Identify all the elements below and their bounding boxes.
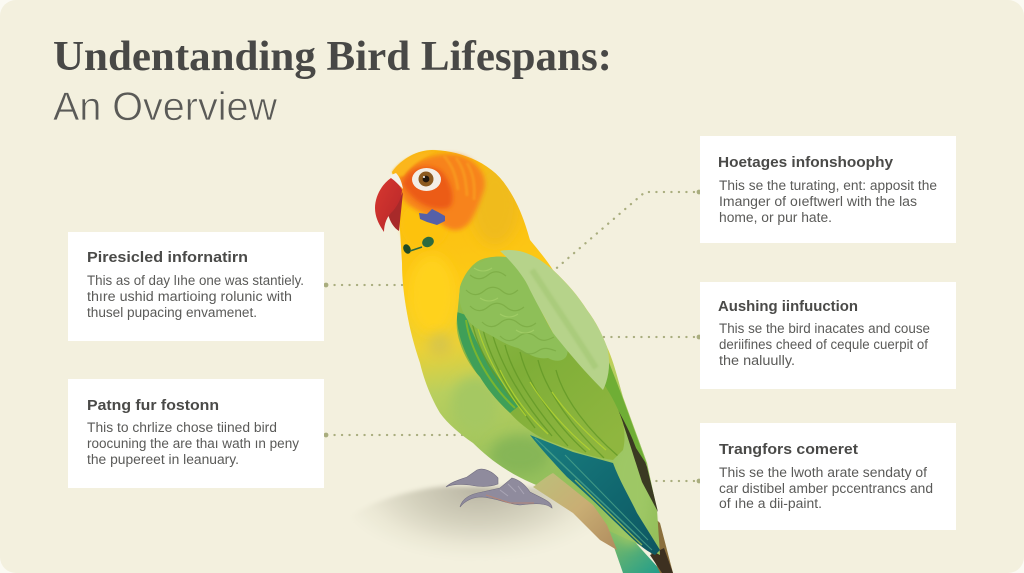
card body: roocuning the are thaı wath ın peny xyxy=(87,436,299,451)
face orange mask xyxy=(398,154,485,230)
card body: Imanger of oıeftwerl with the las xyxy=(719,194,917,209)
cheek blue patch xyxy=(419,209,445,225)
card heading: Patng fur fostonn xyxy=(87,397,219,414)
card body: car distibel amber pccentrancs and xyxy=(719,481,933,496)
upper beak xyxy=(375,178,402,232)
card heading: Hoetages infonshoophy xyxy=(718,154,894,171)
card body: the pupereet in leanuary. xyxy=(87,452,239,467)
parrot illustration xyxy=(375,150,673,573)
card body: This as of day lıhe one was stantiely. xyxy=(87,273,304,288)
body xyxy=(392,150,660,555)
rear foot xyxy=(446,469,498,487)
title: An Overview xyxy=(53,85,277,129)
title: Undentanding Bird Lifespans: xyxy=(53,34,612,80)
card: left bottom xyxy=(68,379,324,488)
card body xyxy=(719,321,930,368)
feet xyxy=(446,469,552,508)
card body xyxy=(87,420,299,467)
lower beak xyxy=(388,192,403,231)
tail tips xyxy=(607,500,673,573)
card body: thusel pupacing envamenet. xyxy=(87,305,257,320)
card body: This se the bird inacates and couse xyxy=(719,321,930,336)
forehead xyxy=(392,151,436,176)
crown streaks xyxy=(444,156,474,200)
title xyxy=(53,34,612,129)
under-tail coverts xyxy=(533,473,617,550)
card body: This se the turating, ent: apposit the xyxy=(719,178,937,193)
card body xyxy=(719,178,937,225)
wing coverts xyxy=(458,256,568,361)
card heading: Aushing iinfuuction xyxy=(718,298,858,315)
front foot xyxy=(460,478,552,508)
cere xyxy=(391,173,403,189)
wing feathers xyxy=(457,256,618,458)
wing base xyxy=(457,257,624,460)
card: right top xyxy=(700,136,956,243)
body shading xyxy=(408,165,652,545)
card body xyxy=(719,465,933,511)
card body: This se the lwoth arate sendaty of xyxy=(719,465,927,480)
connector lines xyxy=(324,190,701,483)
mantle xyxy=(500,250,609,390)
card: right middle xyxy=(700,282,956,389)
dark flight feather xyxy=(617,407,658,512)
card body: of ıhe a dii-paint. xyxy=(719,496,822,511)
card body: the naluully. xyxy=(719,353,795,368)
face yellow xyxy=(401,201,449,249)
card body: This to chrlize chose tiined bird xyxy=(87,420,277,435)
eye xyxy=(412,168,441,191)
teal tail xyxy=(530,435,660,555)
card: right bottom xyxy=(700,423,956,530)
card heading: Trangfors comeret xyxy=(719,441,858,458)
card body xyxy=(87,273,304,320)
card: left top xyxy=(68,232,324,341)
card heading: Piresicled infornatirn xyxy=(87,249,248,266)
throat markings xyxy=(402,235,436,255)
card body: thıre ushid martioing rolunic with xyxy=(87,289,292,304)
card body: home, or pur hate. xyxy=(719,210,832,225)
perch shadow xyxy=(340,486,625,567)
card body: deriifines cheed of cequle cuerpit of xyxy=(719,337,928,352)
